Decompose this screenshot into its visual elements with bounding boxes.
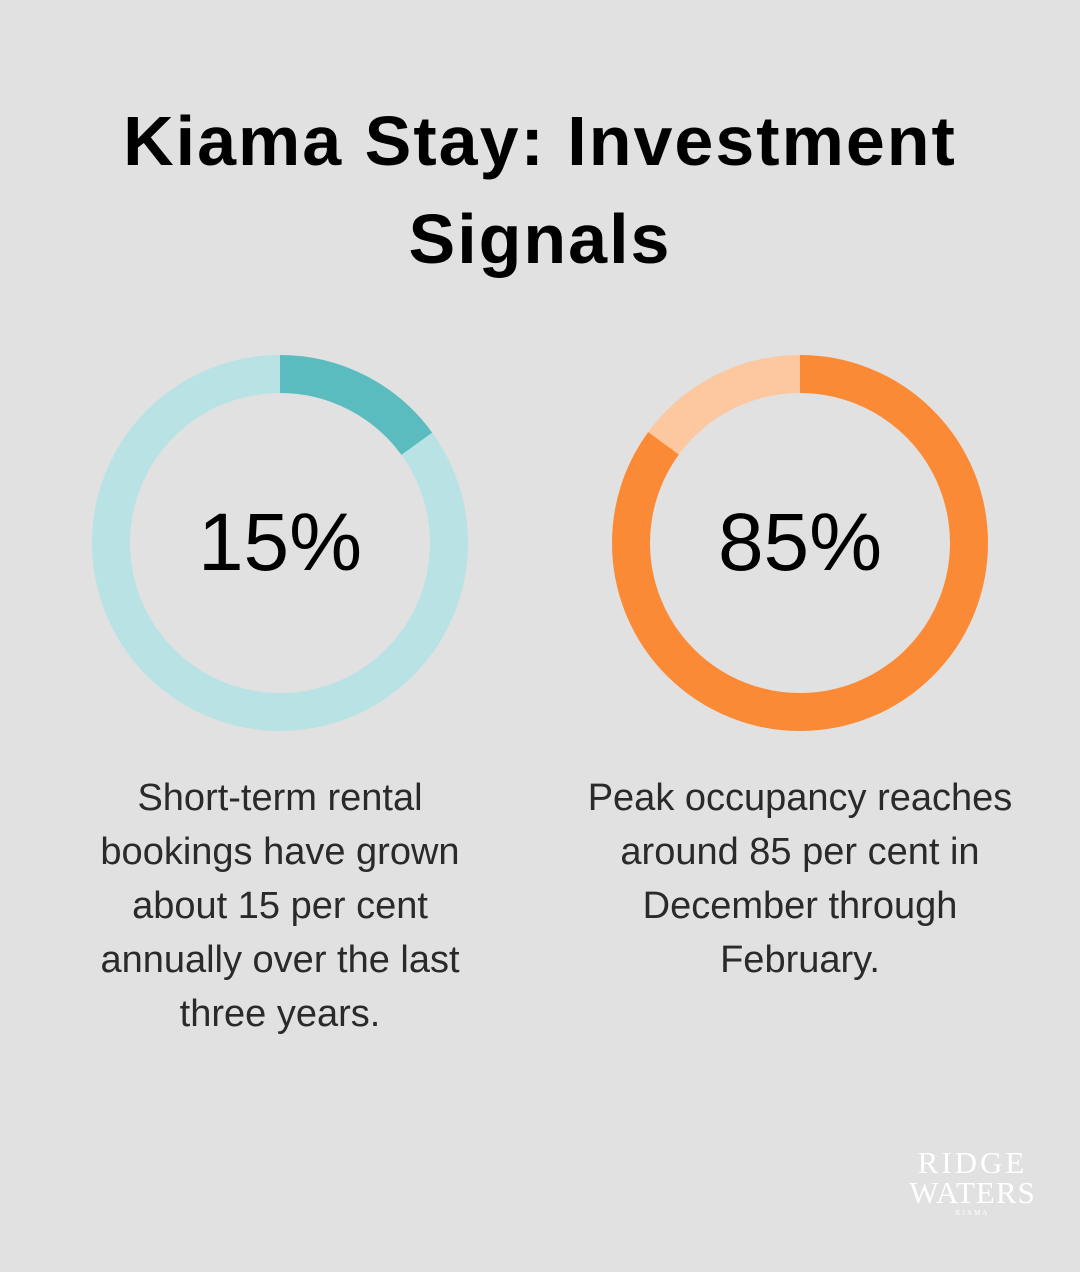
- logo: RIDGE: [918, 1145, 1027, 1180]
- title: Kiama Stay: Investment: [123, 102, 957, 180]
- donut: 85%: 85%: [718, 497, 882, 588]
- title: Signals: [409, 200, 671, 278]
- title: [123, 102, 957, 278]
- donut: 15%: 15%: [198, 497, 362, 588]
- logo: WATERS: [909, 1175, 1036, 1210]
- donut: 85%: [612, 355, 988, 731]
- logo: KIAMA: [956, 1209, 989, 1217]
- logo: [909, 1145, 1036, 1217]
- donut: 15%: [92, 355, 468, 731]
- text: left description: Short-term rental bookings have grown about 15 per cent annually over the last three years.: [100, 777, 460, 1035]
- text: right description: Peak occupancy reaches around 85 per cent in December through February.: [588, 777, 1012, 981]
